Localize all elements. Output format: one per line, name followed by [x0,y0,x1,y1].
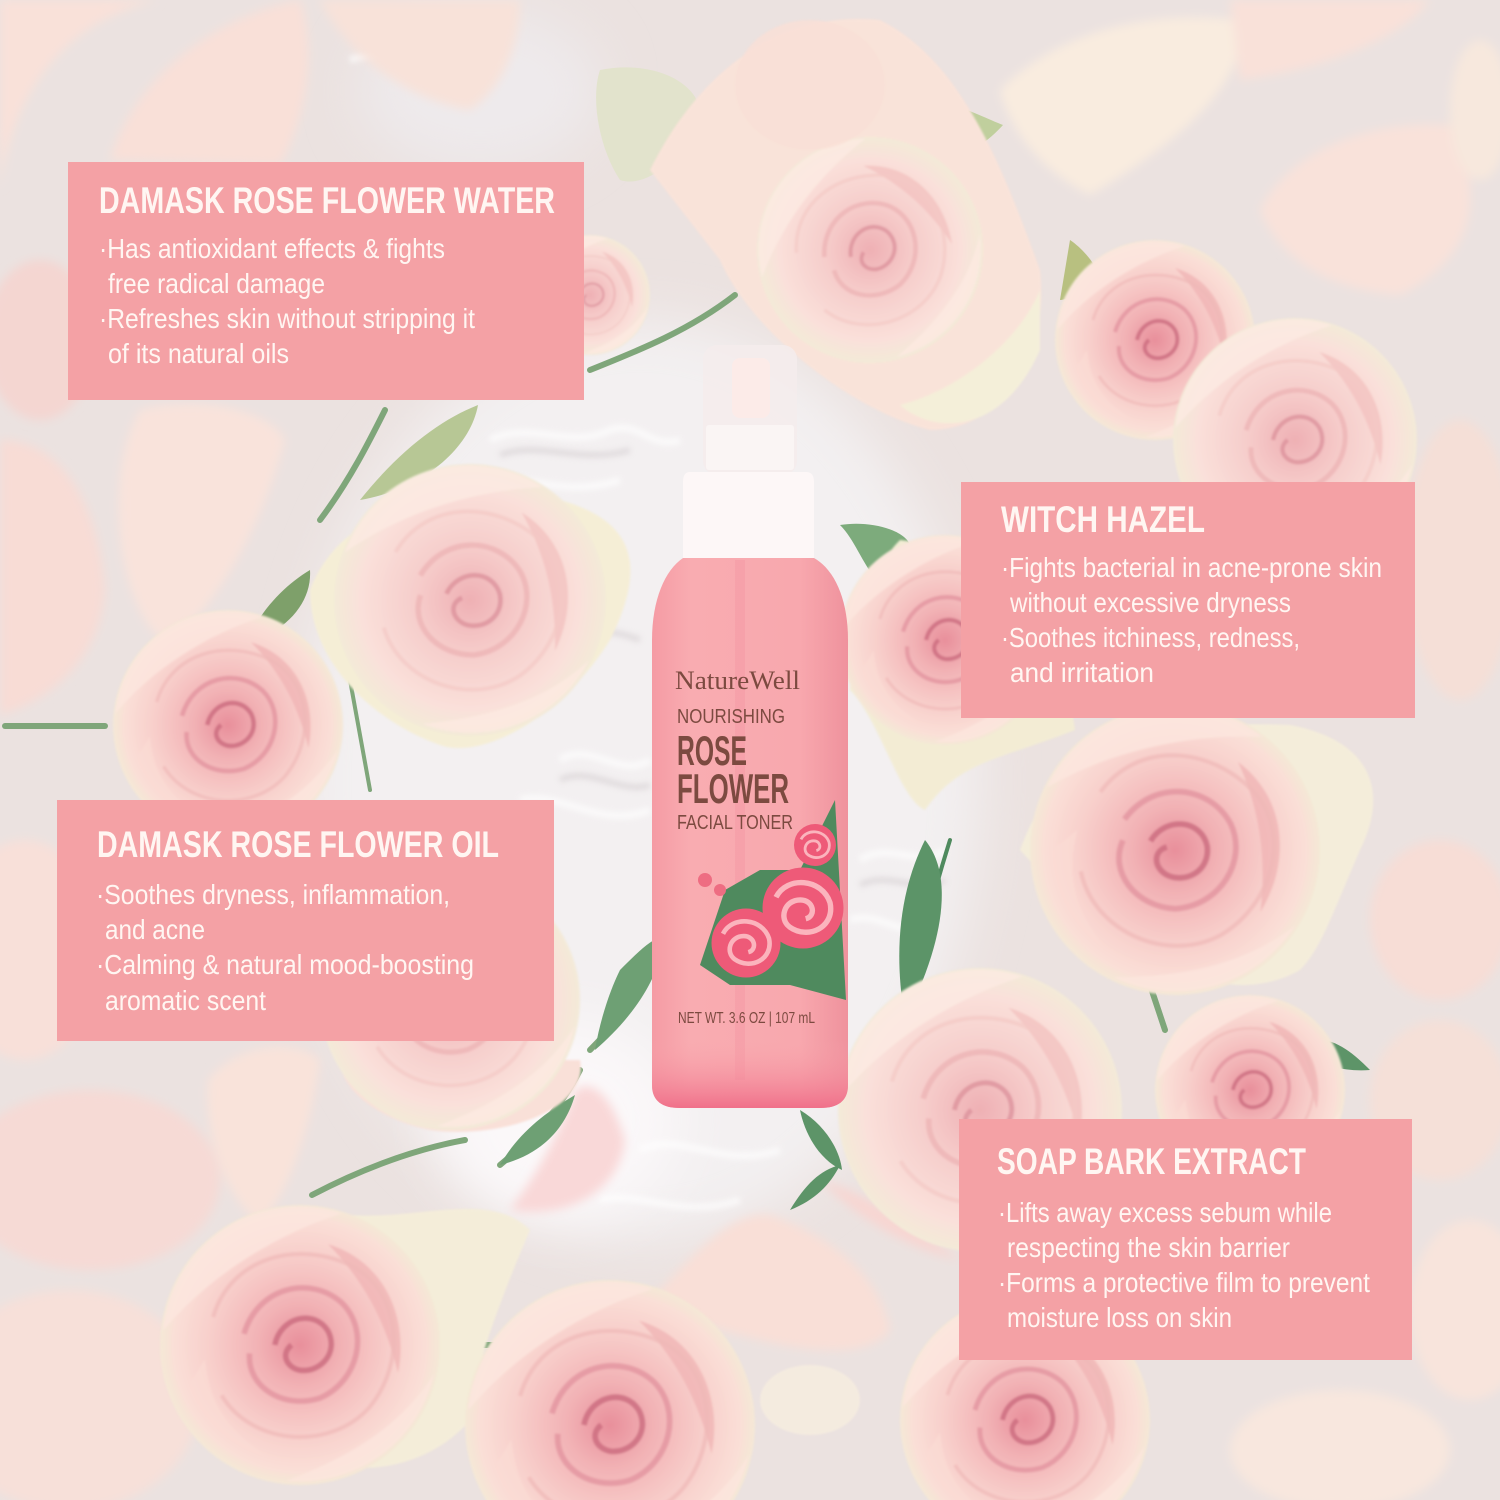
benefits list: respecting the skin barrier [1007,1232,1290,1263]
benefits list: of its natural oils [108,338,289,369]
benefits list [99,233,475,369]
benefits list: moisture loss on skin [1007,1302,1232,1333]
bottle rose illustration [698,800,846,1000]
heading: DAMASK ROSE FLOWER WATER [99,180,555,221]
bottle label text: NOURISHING [677,706,785,728]
benefits list: ·Soothes dryness, inflammation, [96,879,450,910]
benefits list [96,879,474,1016]
benefits list: ·Refreshes skin without stripping it [99,303,475,334]
benefits list [998,1197,1370,1333]
bottle label text [675,666,815,1027]
benefits list: and irritation [1010,657,1154,688]
heading: WITCH HAZEL [1001,499,1205,540]
benefits list: ·Calming & natural mood-boosting [96,949,474,980]
background: stems and leaves [5,295,1165,1345]
product bottle [652,345,848,1108]
panel: witch hazel [961,482,1415,718]
bottle label text: ROSE [677,727,747,774]
benefits list: and acne [105,914,205,945]
panel: damask rose flower water [68,162,584,400]
bottle label text: NatureWell [675,666,800,695]
bottle label text: FLOWER [677,765,789,812]
benefits list: without excessive dryness [1009,587,1291,618]
bottle spray cap [703,345,797,475]
panel: soap bark extract [959,1119,1412,1360]
bottle label text: NET WT. 3.6 OZ | 107 mL [678,1010,815,1027]
background: leaves [245,67,1370,1210]
benefits list: aromatic scent [105,985,266,1016]
benefits list: ·Soothes itchiness, redness, [1001,622,1300,653]
benefits list: ·Forms a protective film to prevent [998,1267,1370,1298]
benefits list: ·Lifts away excess sebum while [998,1197,1332,1228]
benefits list [1001,552,1382,688]
bottle label text: FACIAL TONER [677,812,793,834]
benefits list: free radical damage [108,268,325,299]
bottle body [652,558,848,1108]
benefits list: ·Has antioxidant effects & fights [99,233,445,264]
heading: DAMASK ROSE FLOWER OIL [97,824,499,865]
heading: SOAP BARK EXTRACT [997,1141,1306,1182]
panel: damask rose flower oil [57,800,554,1041]
benefits list: ·Fights bacterial in acne-prone skin [1001,552,1382,583]
bottle collar [683,472,814,558]
